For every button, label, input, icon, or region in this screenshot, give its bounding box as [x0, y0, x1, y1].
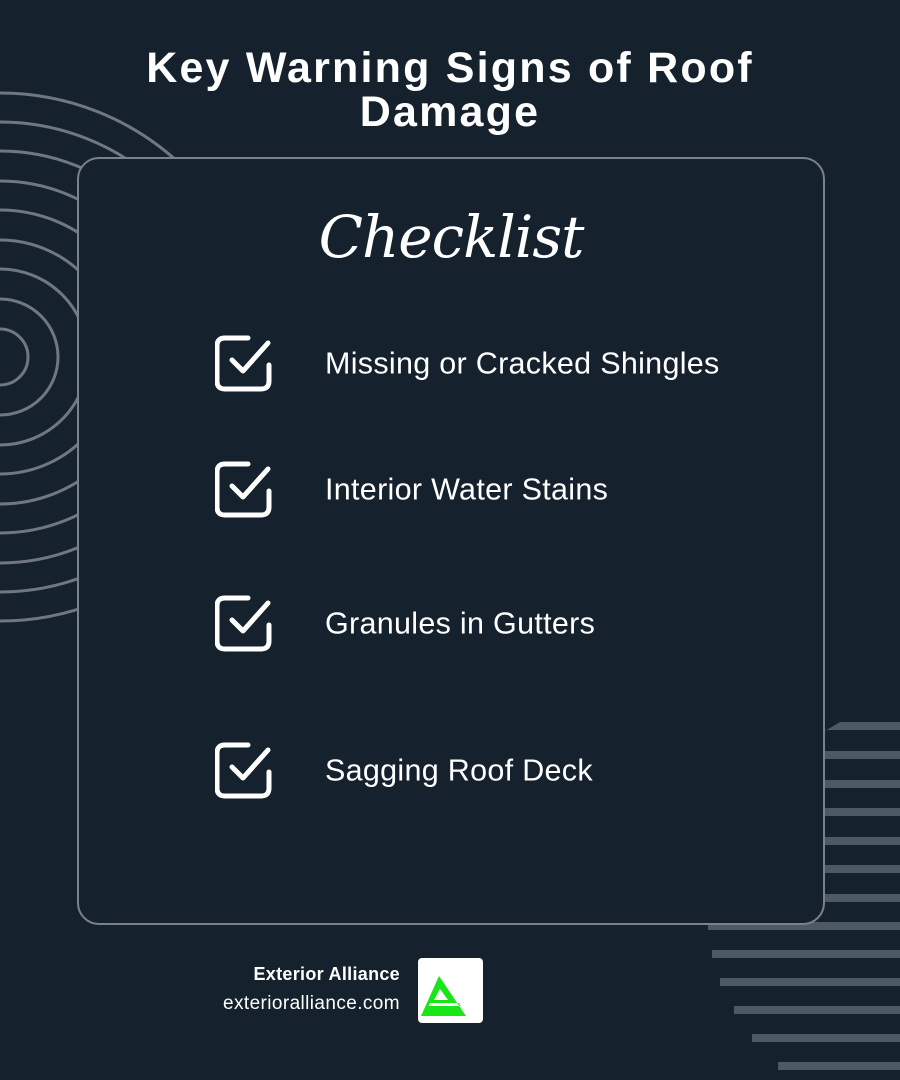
item: missing shingles: [215, 336, 720, 392]
icon: checkbox: [215, 462, 272, 518]
logo: [418, 958, 483, 1023]
footer brand text: [223, 964, 400, 1014]
item: water stains: [215, 462, 608, 518]
footer brand text: exterioralliance.com: [223, 993, 400, 1014]
panel: checklist: [77, 157, 825, 925]
icon: checkbox: [215, 336, 272, 392]
heading: Checklist: Checklist: [319, 203, 583, 271]
item: water stains: Interior Water Stains: [325, 472, 608, 506]
title: [146, 44, 754, 136]
icon: checkbox: [215, 596, 272, 652]
item: sagging deck: [215, 742, 593, 798]
item: granules: Granules in Gutters: [325, 606, 595, 640]
item: granules: [215, 596, 595, 652]
item: missing shingles: Missing or Cracked Shingles: [325, 346, 720, 380]
item: sagging deck: Sagging Roof Deck: [325, 754, 593, 788]
footer brand text: Exterior Alliance: [254, 964, 400, 984]
title: Damage: [360, 88, 540, 136]
title: Key Warning Signs of Roof: [146, 44, 754, 92]
icon: checkbox: [215, 742, 272, 798]
